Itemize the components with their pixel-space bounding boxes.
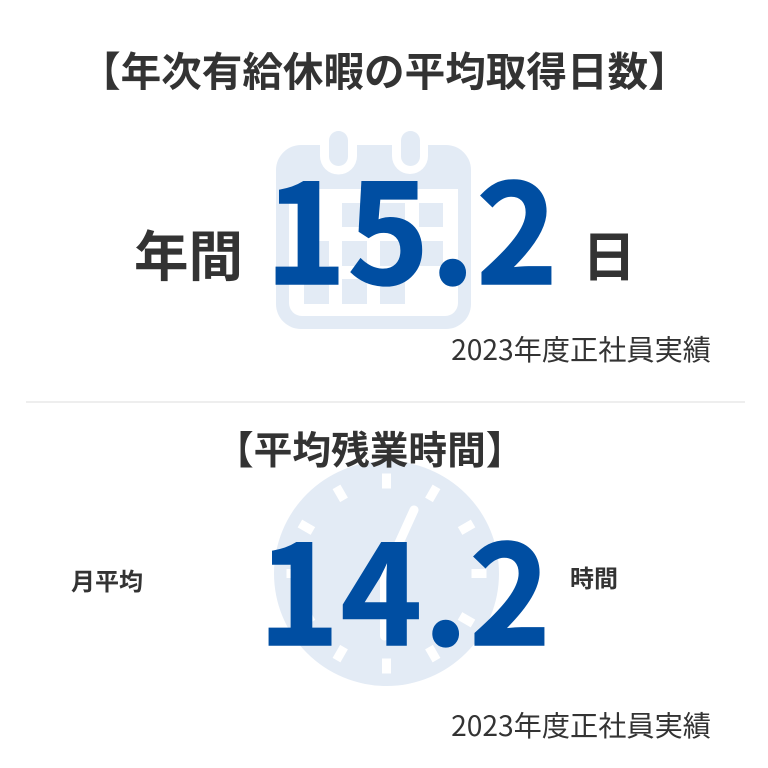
note: fiscal 2023: 2023年度正社員実績 (451, 704, 711, 745)
label: hours: 時間 (570, 559, 618, 594)
label: per year: 年間 (134, 213, 243, 292)
heading: annual paid leave: 【年次有給休暇の平均取得日数】 (80, 39, 689, 98)
number: 14.2: 14.2 (258, 485, 552, 685)
label: monthly average: 月平均 (71, 562, 143, 597)
icon: clock (274, 461, 499, 686)
note: fiscal 2023: 2023年度正社員実績 (451, 328, 711, 369)
divider (26, 401, 745, 403)
heading: average overtime: 【平均残業時間】 (215, 420, 524, 476)
label: days: 日 (582, 213, 636, 292)
number: 15.2: 15.2 (265, 124, 559, 324)
icon: calendar (276, 131, 471, 329)
